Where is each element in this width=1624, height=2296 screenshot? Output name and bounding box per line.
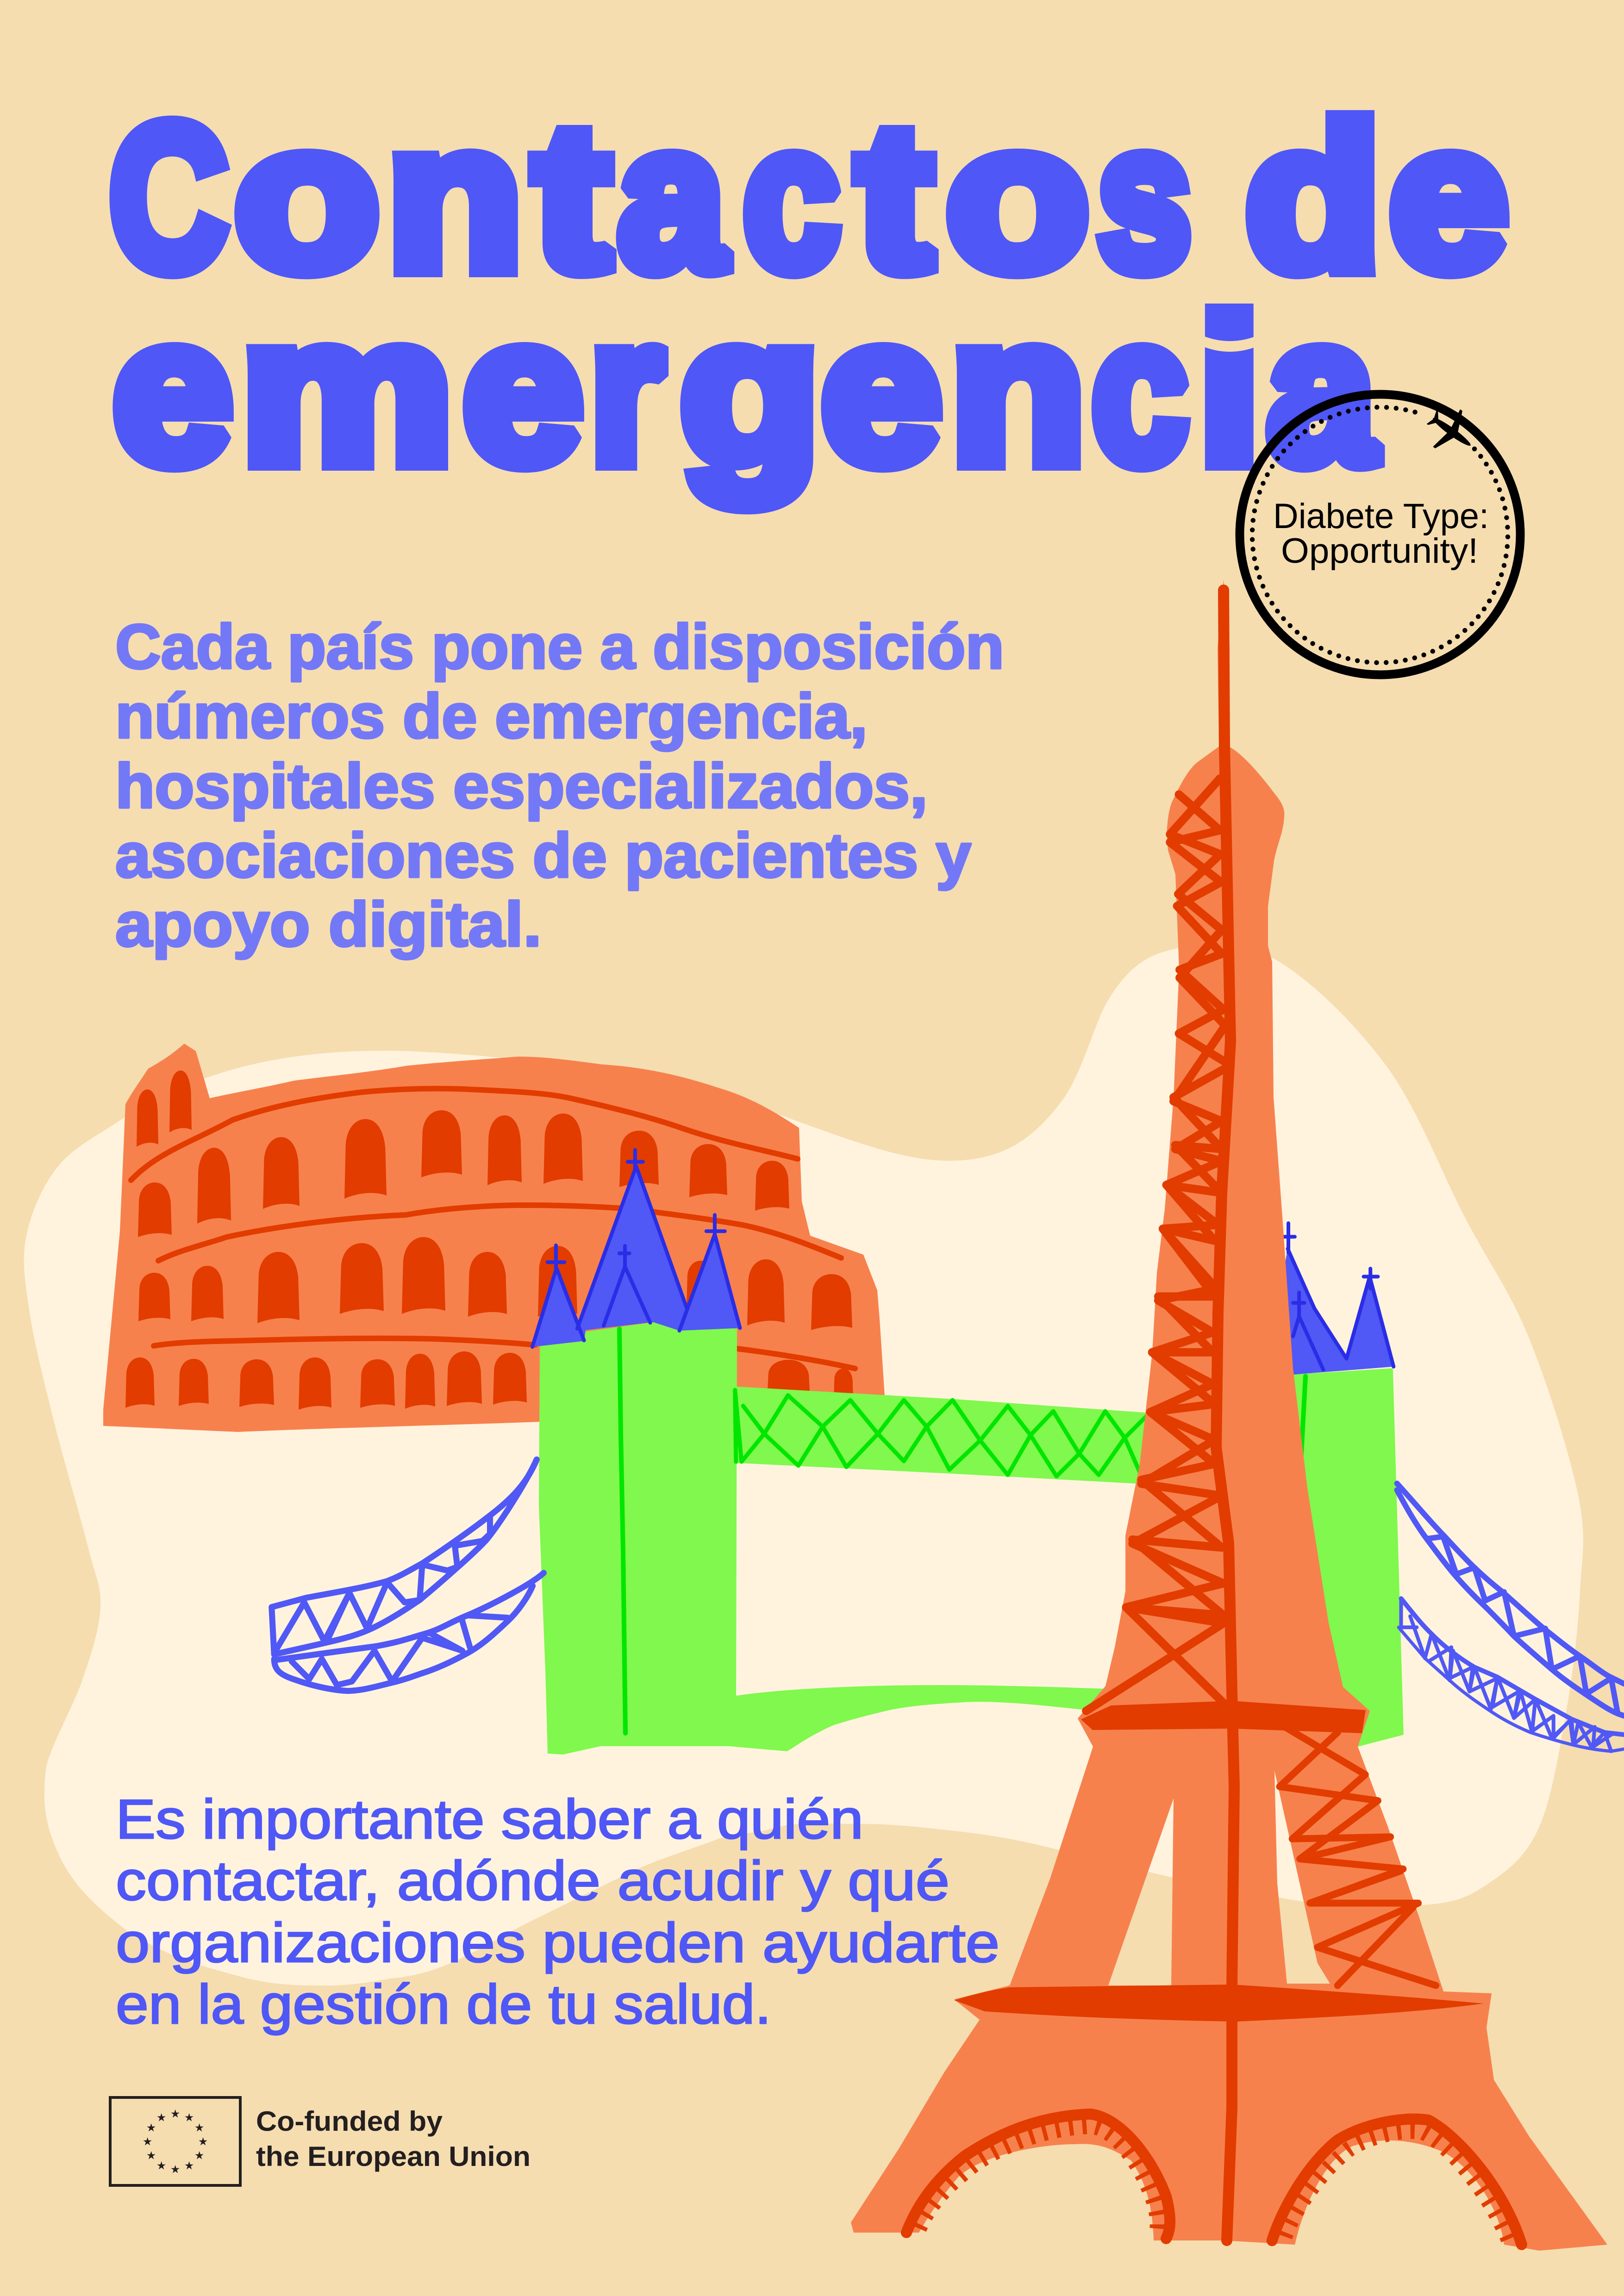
tower bridge left tower and deck xyxy=(539,1322,1157,1755)
right tower roof outlines and crosses xyxy=(1282,1223,1393,1370)
EU stars xyxy=(143,2109,207,2173)
title: i xyxy=(1199,275,1260,506)
colosseum windows xyxy=(125,1070,853,1410)
title: g xyxy=(681,275,819,507)
subheading xyxy=(115,611,1004,959)
badge text: Opportunity! xyxy=(1281,531,1478,571)
left bascule arms xyxy=(272,1460,543,1691)
eiffel tower xyxy=(851,579,1607,2251)
spire fills xyxy=(532,1166,740,1347)
EU text: Co-funded by xyxy=(256,2106,443,2137)
eiffel arches xyxy=(906,2114,1170,2239)
badge text: Diabete Type: xyxy=(1273,497,1489,536)
subheading: apoyo digital. xyxy=(115,889,542,959)
title: a xyxy=(1268,275,1377,506)
eiffel first platform xyxy=(1081,1701,1366,1733)
EU text xyxy=(256,2106,531,2172)
badge ring xyxy=(1240,394,1520,675)
title: d xyxy=(1246,81,1380,312)
subheading: asociaciones de pacientes y xyxy=(115,820,971,890)
subheading: Cada país pone a disposición xyxy=(115,611,1004,682)
right tower body xyxy=(1264,1368,1404,1747)
body text xyxy=(116,1788,999,2035)
EU co-funded logo xyxy=(110,2097,531,2185)
title: m xyxy=(241,275,453,506)
walkway lattice xyxy=(735,1390,1148,1476)
title: t xyxy=(857,81,932,312)
title: c xyxy=(743,81,840,312)
right tower roofs xyxy=(1264,1249,1393,1376)
body text: contactar, adónde acudir y qué xyxy=(116,1850,949,1912)
right tower line xyxy=(1301,1376,1305,1456)
title: c xyxy=(1092,275,1188,506)
tower bridge right tower xyxy=(1264,1223,1404,1747)
cream blob xyxy=(24,944,1583,1985)
left spires xyxy=(532,1150,740,1347)
title: e xyxy=(113,275,232,506)
title: s xyxy=(1098,81,1191,312)
badge dotted ring xyxy=(1252,407,1508,663)
walkway xyxy=(736,1387,1157,1485)
badge xyxy=(1240,394,1520,675)
eiffel leg lattice xyxy=(906,1723,1522,2245)
body text: organizaciones pueden ayudarte xyxy=(116,1912,999,1974)
title: n xyxy=(387,81,522,312)
body text: en la gestión de tu salud. xyxy=(116,1973,771,2035)
colosseum xyxy=(103,1044,885,1432)
tower centre line xyxy=(619,1329,625,1733)
EU flag box xyxy=(110,2097,240,2185)
subheading: números de emergencia, xyxy=(115,681,868,751)
title: e xyxy=(1390,81,1508,312)
title: e xyxy=(822,275,941,506)
deck xyxy=(539,1322,1130,1755)
title: r xyxy=(590,275,663,506)
right bascule arms xyxy=(1397,1483,1624,1751)
title: o xyxy=(235,81,379,312)
eiffel lattice xyxy=(1086,778,1230,1711)
title xyxy=(110,81,1508,507)
subheading: hospitales especializados, xyxy=(115,751,928,821)
colosseum body xyxy=(103,1044,885,1432)
title: t xyxy=(534,81,610,312)
spire outlines and crosses xyxy=(532,1150,740,1347)
colosseum cornice lines xyxy=(131,1089,855,1369)
EU text: the European Union xyxy=(256,2141,531,2172)
title: a xyxy=(618,81,726,312)
body text: Es importante saber a quién xyxy=(116,1788,863,1850)
eiffel base platform xyxy=(954,1985,1484,2022)
icon: airplane xyxy=(1418,398,1484,464)
title: n xyxy=(951,275,1085,506)
title: C xyxy=(110,81,227,312)
eiffel body xyxy=(851,579,1607,2251)
badge text xyxy=(1273,497,1489,571)
title: e xyxy=(463,275,582,506)
eiffel centre line xyxy=(1216,590,1234,2240)
title: o xyxy=(947,81,1088,312)
